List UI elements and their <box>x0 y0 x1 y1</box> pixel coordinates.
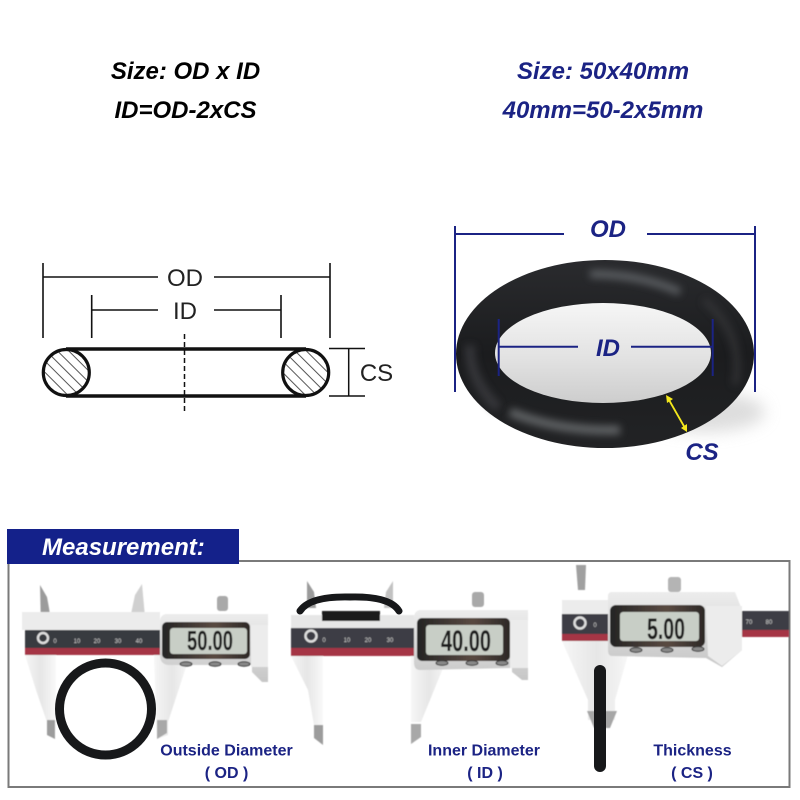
CS label: CS <box>685 439 719 466</box>
caliper photo: thickness: 0 <box>593 623 597 629</box>
dark block <box>322 611 380 621</box>
label: outside diameter <box>160 742 293 782</box>
CS yellow double arrow <box>666 395 687 432</box>
upper jaws <box>40 585 52 628</box>
heading banner: measurement <box>7 529 239 564</box>
LCD frame <box>610 605 705 647</box>
head <box>608 592 742 667</box>
LCD reading: 5.00 <box>647 613 685 646</box>
upper jaws <box>307 581 316 608</box>
title: formula in general terms: ID=OD-2xCS <box>114 97 257 124</box>
caliper photo: thickness: 80 <box>766 620 773 626</box>
OD dimension <box>43 263 330 338</box>
LCD reading: 40.00 <box>441 625 491 658</box>
screw <box>472 592 484 607</box>
caliper photo: thickness <box>562 565 789 728</box>
caliper photo: outside diameter: 20 <box>94 639 101 645</box>
ID dimension: ID <box>173 298 197 325</box>
lower jaws <box>291 656 323 725</box>
diagram: o-ring cross section <box>43 263 393 414</box>
caliper photo: outside diameter <box>22 584 268 739</box>
caliper photo: outside diameter: 10 <box>74 639 81 645</box>
o-ring side view <box>594 665 606 772</box>
OD dimension <box>455 216 755 392</box>
caliper photo: inner diameter: 20 <box>365 638 372 644</box>
label: thickness <box>653 742 732 782</box>
scale <box>562 614 610 634</box>
caliper photo: outside diameter: 30 <box>115 639 122 645</box>
caliper photo: inner diameter: 10 <box>344 638 351 644</box>
CS dimension <box>329 348 393 396</box>
buttons <box>180 662 250 666</box>
screw <box>217 596 228 611</box>
screw <box>668 577 681 592</box>
LCD frame <box>162 622 250 659</box>
title: formula in general terms <box>111 58 260 124</box>
label: inner diameter <box>428 742 540 782</box>
label: inner diameter: ( ID ) <box>467 765 503 782</box>
o-ring section drawing <box>43 334 329 414</box>
scale <box>291 628 415 649</box>
buttons <box>630 647 704 652</box>
lower jaws <box>25 655 56 739</box>
caliper photo: inner diameter: 30 <box>387 638 394 644</box>
title: worked example <box>502 58 703 124</box>
caliper photo: outside diameter: 40 <box>136 639 143 645</box>
label: inner diameter: Inner Diameter <box>428 742 540 760</box>
o-ring on caliper <box>60 663 152 755</box>
head <box>414 610 528 680</box>
caliper photo: outside diameter: 0 <box>53 639 57 645</box>
o-ring on caliper <box>300 597 399 611</box>
caliper photo: inner diameter <box>291 581 528 745</box>
buttons <box>436 661 508 665</box>
LCD reading: 50.00 <box>187 625 233 656</box>
label: outside diameter: ( OD ) <box>205 765 248 782</box>
OD dimension: OD <box>167 265 203 292</box>
ID dimension <box>92 295 281 338</box>
panel frame <box>8 561 790 787</box>
title: worked example: 40mm=50-2x5mm <box>502 97 703 124</box>
head <box>160 614 268 682</box>
photo: black rubber o-ring with dimensions <box>455 216 765 466</box>
label: outside diameter: Outside Diameter <box>160 742 293 760</box>
scale <box>25 630 162 649</box>
heading banner: measurement: Measurement: <box>42 534 205 561</box>
caliper photo: inner diameter: 0 <box>322 638 326 644</box>
label: thickness: Thickness <box>653 742 732 760</box>
CS dimension: CS <box>360 360 393 387</box>
caliper photo: thickness: 70 <box>746 620 753 626</box>
ring shadow <box>645 392 765 432</box>
ID dimension <box>499 319 713 376</box>
title: worked example: Size: 50x40mm <box>517 58 689 85</box>
LCD frame <box>417 618 510 661</box>
label: thickness: ( CS ) <box>671 765 713 782</box>
ID dimension: ID <box>596 335 620 362</box>
lower jaw <box>562 641 632 720</box>
upper jaw <box>576 565 586 590</box>
ring body <box>456 260 754 448</box>
panel: measurement <box>7 529 790 787</box>
title: formula in general terms: Size: OD x ID <box>111 58 260 85</box>
OD dimension: OD <box>590 216 626 243</box>
